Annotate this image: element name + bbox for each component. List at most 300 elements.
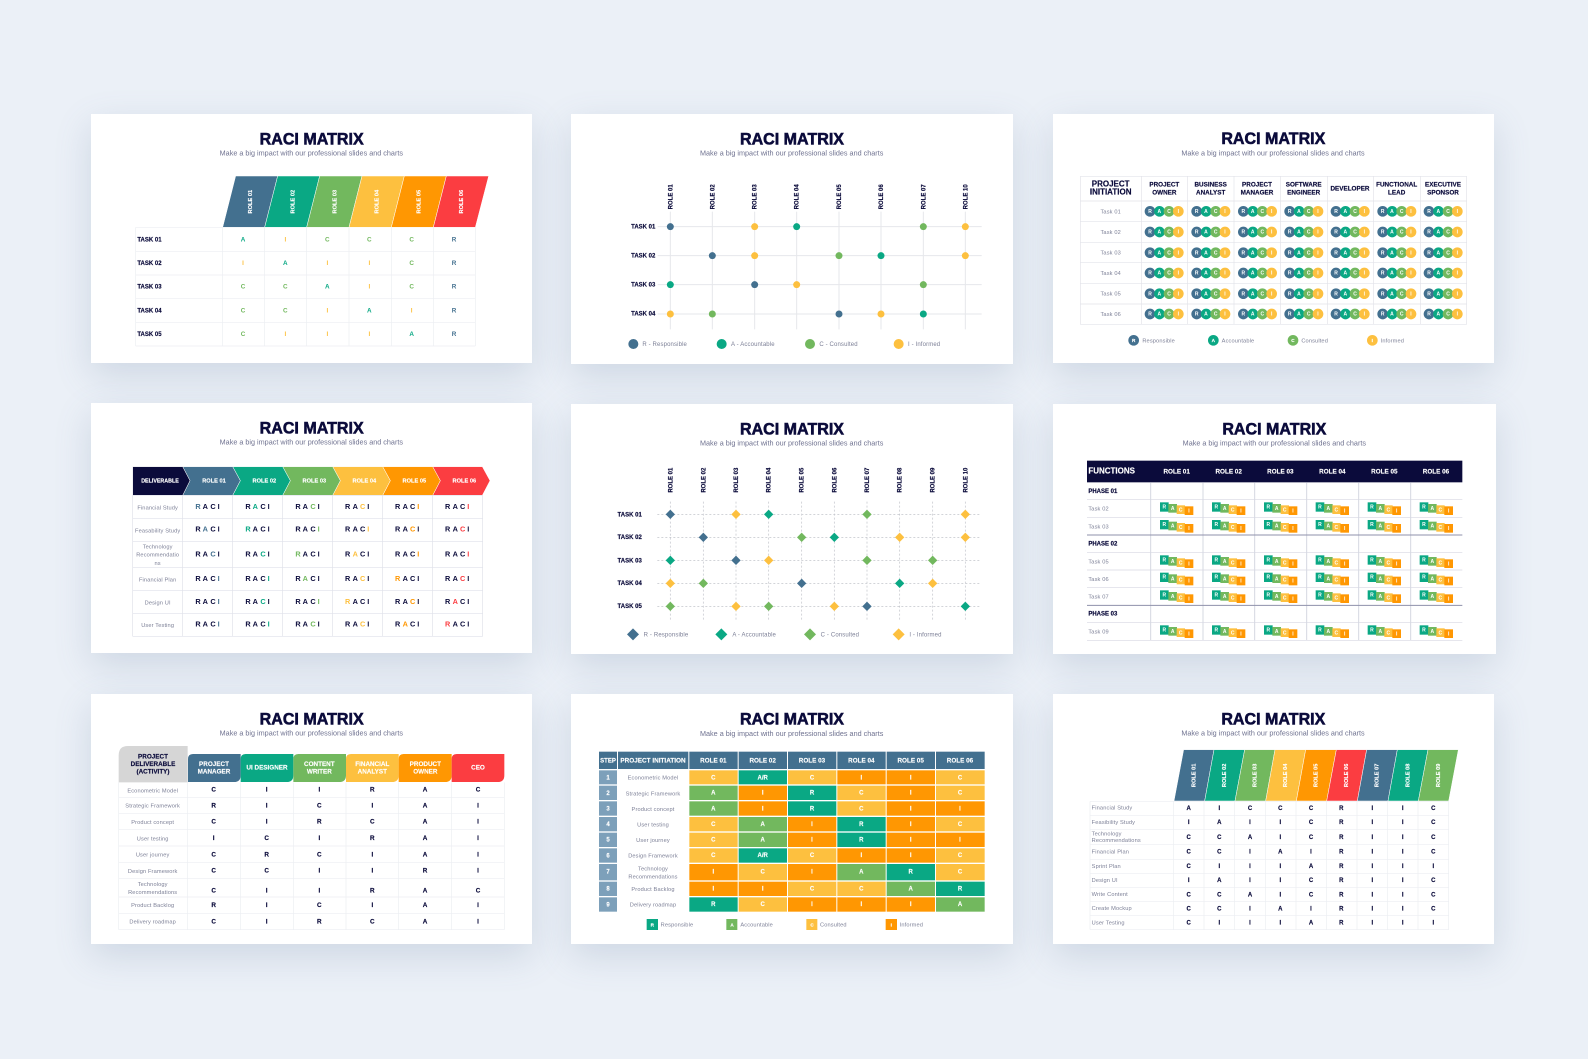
title: RACI MATRIX [260,710,364,729]
activity table: RICIAI [211,902,479,909]
phase table: RACI [1370,557,1398,567]
deliverable table: Feasability Study [135,528,180,534]
dot grid chart: TASK 02 [631,254,656,260]
chip table: RACI [1334,291,1366,297]
phase table: RACI [1215,557,1242,567]
heatmap table: A [958,902,963,908]
heatmap table: I [811,870,813,876]
heatmap table: I [811,902,813,908]
legend: C - Consulted [821,632,859,638]
deliverable table: RACI [295,620,320,629]
deliverable table: RACI [395,550,419,559]
subtitle: Make a big impact with our professional slides and charts [700,729,884,738]
heatmap table: Econometric Model [628,776,678,782]
chip table: RACI [1288,209,1319,215]
slanted role headers: ROLE 05 [417,190,423,213]
chip table: RACI [1242,230,1273,236]
heatmap table: A/R [757,853,768,859]
task table: IAIICRIIC [1188,820,1436,826]
panel: circle chip matrix [1053,114,1494,363]
heatmap table: A [760,838,765,844]
deliverable table: User Testing [141,623,174,629]
functions header bar: ROLE 02 [1215,468,1242,475]
legend: C [810,922,814,927]
chip table: RACI [1148,230,1180,236]
deliverable table: RACI [345,597,369,606]
role labels: ROLE 06 [879,184,885,209]
phase table: RACI [1422,627,1450,637]
deliverable table: RACI [445,597,469,606]
heatmap table: C [859,791,864,797]
chip table: RACI [1381,312,1412,318]
phase table [1087,482,1462,640]
task table: C [367,236,372,243]
phase table: Task 07 [1088,594,1109,600]
heatmap table: I [959,806,961,812]
diamond grid chart: TASK 04 [618,581,642,587]
phase table: RACI [1422,575,1450,585]
role labels: ROLE 04 [767,467,773,493]
chip table: RACI [1334,312,1366,318]
activity table: RICIAI [211,802,479,809]
title: RACI MATRIX [740,420,844,439]
heatmap table: I [910,853,912,859]
chip table: RACI [1427,230,1459,236]
phase table: Task 05 [1088,560,1109,566]
chip table: RACI [1334,250,1366,256]
heatmap table: A [859,870,864,876]
legend: A - Accountable [732,632,777,638]
chip table: Task 04 [1100,271,1121,277]
task table: TASK 03 [137,284,162,290]
deliverable table: RACI [395,597,419,606]
role labels [668,184,969,209]
heatmap table: C [810,853,815,859]
panel: dot grid matrix [571,114,1013,364]
role headers: PROJECT [199,761,229,768]
table headers: ENGINEER [1287,190,1321,197]
chip table: RACI [1427,291,1459,297]
chip table: RACI [1195,312,1226,318]
dot grid chart [631,212,982,329]
role labels: ROLE 10 [963,184,969,209]
heatmap table: A [711,806,716,812]
task table: IAIICRIIC [1188,878,1436,884]
heatmap table: C [810,775,815,781]
chip table: RACI [1381,250,1412,256]
chevron headers: ROLE 03 [303,479,326,485]
slanted role headers: ROLE 04 [1283,763,1289,787]
deliverable header cell [119,746,188,782]
deliverable header cell: (ACTIVITY) [136,769,170,776]
heatmap table: C [711,822,716,828]
heatmap table: R [908,870,913,876]
slanted role headers: ROLE 01 [248,190,254,213]
deliverable table: RACI [445,502,469,511]
heatmap table: Strategic Framework [626,791,680,797]
table headers: EXECUTIVE [1425,182,1461,189]
phase table: RACI [1215,575,1242,585]
legend: C - Consulted [819,342,858,348]
legend: Responsible [661,922,693,928]
task table: Create Mockup [1092,906,1132,912]
chip table: Task 06 [1100,312,1121,318]
task table: CIIIARIII [1186,921,1434,927]
chip table [1080,176,1467,324]
subtitle: Make a big impact with our professional slides and charts [220,729,403,738]
heatmap table: A [908,887,913,893]
deliverable table: RACI [195,574,220,583]
chip table: RACI [1288,291,1319,297]
slanted role headers: ROLE 08 [1405,764,1411,787]
heatmap table: Product concept [632,807,675,813]
diamond grid chart: TASK 01 [618,512,642,518]
task table: I [368,331,370,338]
deliverable table: RACI [445,550,469,559]
heatmap table: I [811,838,813,844]
heatmap table: I [712,887,714,893]
heatmap table: I [910,838,912,844]
functions header bar: FUNCTIONS [1088,466,1136,475]
chevron headers: ROLE 02 [253,479,276,485]
phase table: RACI [1370,592,1398,602]
phase table: RACI [1318,575,1346,585]
slanted role headers: ROLE 06 [1344,764,1350,787]
activity table: User testing [137,836,169,842]
chip table: RACI [1427,271,1459,277]
task table: Feasibility Study [1092,820,1135,826]
heatmap table: 4 [606,822,610,828]
activity table: CIRCAI [211,919,479,926]
chip table: RACI [1288,250,1319,256]
functions header bar: ROLE 03 [1267,468,1294,475]
deliverable header cell: PROJECT [138,753,168,760]
deliverable table: RACI [445,525,469,534]
table headers: LEAD [1388,190,1406,197]
heatmap table: R [711,902,716,908]
slanted role headers: ROLE 09 [1436,764,1442,787]
heatmap table: I [860,775,862,781]
role labels: ROLE 07 [921,184,927,209]
slanted role headers: ROLE 07 [1375,764,1381,787]
phase table: RACI [1163,504,1190,514]
task table: Sprint Plan [1092,864,1121,870]
deliverable table: RACI [195,597,220,606]
phase table: RACI [1215,627,1242,637]
phase table: RACI [1370,504,1398,514]
heatmap table: C [859,806,864,812]
panel: slanted header matrix [91,114,532,363]
deliverable table: Financial Study [137,505,178,511]
heatmap table: I [910,902,912,908]
role labels: ROLE 10 [963,467,969,493]
table headers: PROJECT [1149,182,1179,189]
title: RACI MATRIX [740,710,844,729]
chip table: RACI [1195,209,1226,215]
chip table: RACI [1242,291,1273,297]
task table: Write Content [1092,892,1128,898]
phase table: RACI [1318,522,1346,532]
legend: A [730,922,734,927]
deliverable table: Financial Plan [139,577,176,583]
phase table: RACI [1422,557,1450,567]
deliverable table: RACI [445,574,469,583]
heatmap table: C [958,870,963,876]
deliverable table: RACI [195,620,220,629]
task table: A [241,236,246,243]
phase table: RACI [1318,627,1346,637]
role labels [668,467,969,493]
phase table: RACI [1163,627,1190,637]
legend [628,339,940,349]
task table: Technology [1092,832,1122,838]
role headers: WRITER [307,769,332,776]
heatmap table: I [762,887,764,893]
heatmap header: ROLE 04 [848,757,875,764]
heatmap table: C [711,838,716,844]
slanted role headers [1174,750,1458,801]
chip table: RACI [1242,312,1273,318]
role labels: ROLE 02 [701,467,707,493]
heatmap table: C [810,887,815,893]
heatmap table: User journey [636,838,670,844]
heatmap table: C [958,775,963,781]
phase table: RACI [1267,627,1294,637]
activity table: CRCIAI [211,851,479,858]
deliverable table: RACI [245,597,270,606]
activity table: Delivery roadmap [129,920,176,926]
functions header bar [1087,461,1462,482]
heatmap header: ROLE 01 [700,757,727,764]
task table: C [409,283,414,290]
legend: I [1372,338,1373,343]
heatmap header [599,752,985,769]
phase table: RACI [1163,522,1190,532]
task table: Financial Study [1092,806,1132,812]
legend: Accountable [740,922,773,928]
phase table: RACI [1267,522,1294,532]
chip table: RACI [1427,312,1459,318]
slanted role headers [223,176,489,227]
heatmap table: A [760,822,765,828]
heatmap table: R [958,887,963,893]
phase table: Task 09 [1088,630,1109,636]
deliverable table: Recommendatio [136,553,179,559]
heatmap table: C [760,902,765,908]
legend: R [1132,338,1136,343]
legend [1128,335,1404,346]
heatmap table: I [762,806,764,812]
functions header bar: ROLE 04 [1319,468,1346,475]
role labels: ROLE 02 [710,184,716,209]
chip table: RACI [1288,230,1319,236]
subtitle: Make a big impact with our professional slides and charts [700,148,884,157]
deliverable table: RACI [345,620,369,629]
chip table: RACI [1334,209,1366,215]
task table [1090,801,1449,930]
role labels: ROLE 07 [865,467,871,493]
chip table: RACI [1195,230,1226,236]
functions header bar: ROLE 01 [1163,468,1190,475]
heatmap table: I [910,822,912,828]
phase table: RACI [1422,592,1450,602]
subtitle: Make a big impact with our professional slides and charts [700,439,884,448]
activity table: CCIIRI [211,868,479,875]
chip table: RACI [1334,230,1366,236]
task table: I [411,307,413,314]
heatmap table: I [712,870,714,876]
activity table: Product Backlog [131,903,174,909]
table headers [1090,179,1461,197]
slanted role headers: ROLE 01 [1191,764,1197,787]
deliverable table: RACI [195,502,220,511]
diamond grid chart: TASK 02 [618,535,642,541]
chip table: RACI [1334,271,1366,277]
phase table: RACI [1267,504,1294,514]
heatmap table: Design Framework [628,854,678,860]
role headers: CEO [471,765,485,772]
role labels: ROLE 03 [753,184,759,209]
heatmap table: R [859,822,864,828]
heatmap header: ROLE 03 [799,757,826,764]
title: RACI MATRIX [740,129,844,148]
task table: TASK 05 [137,332,162,338]
table headers: DEVELOPER [1330,186,1370,193]
deliverable table [133,495,483,636]
legend: R [651,922,655,927]
subtitle: Make a big impact with our professional slides and charts [220,148,403,157]
heatmap table: C [760,870,765,876]
title: RACI MATRIX [1222,420,1326,439]
functions header bar: ROLE 06 [1423,468,1450,475]
legend [647,919,923,930]
phase table: RACI [1215,592,1242,602]
legend: Consulted [820,922,847,928]
table headers: MANAGER [1241,190,1274,197]
role labels: ROLE 05 [800,467,806,493]
deliverable table: RACI [395,502,419,511]
task table: R [452,236,457,243]
title: RACI MATRIX [1221,710,1325,729]
task table: A [283,260,288,267]
activity table: ICIRAI [213,835,479,842]
slanted role headers: ROLE 02 [1222,764,1228,787]
heatmap table: I [762,791,764,797]
task table: I [326,307,328,314]
table headers: FUNCTIONAL [1376,182,1417,189]
task table: C [409,260,414,267]
legend: Responsible [1142,338,1175,344]
subtitle: Make a big impact with our professional slides and charts [1183,439,1366,448]
legend: R - Responsible [644,632,689,638]
role headers: MANAGER [198,769,231,776]
deliverable header cell: DELIVERABLE [131,761,175,768]
phase table: RACI [1163,575,1190,585]
chip table: RACI [1427,209,1459,215]
deliverable table: RACI [245,502,270,511]
heatmap table: 9 [606,902,610,908]
role labels: ROLE 06 [832,467,838,493]
phase table: RACI [1163,592,1190,602]
chevron headers: ROLE 04 [353,479,377,485]
activity table: Product concept [131,820,174,826]
deliverable table: RACI [345,574,369,583]
task table: I [284,331,286,338]
title: RACI MATRIX [260,419,364,438]
legend: C [1291,338,1295,343]
phase table: RACI [1318,504,1346,514]
slanted role headers: ROLE 04 [375,189,381,213]
chip table: RACI [1288,271,1319,277]
chip table: RACI [1381,271,1412,277]
task table: R [452,283,457,290]
heatmap table: R [810,791,815,797]
deliverable table: RACI [295,574,320,583]
deliverable table: RACI [445,620,469,629]
role labels: ROLE 08 [898,467,904,493]
task table: C [241,283,246,290]
activity table [119,782,504,930]
chevron headers: ROLE 01 [202,479,226,485]
heatmap header: ROLE 02 [749,757,776,764]
chevron headers: ROLE 06 [453,479,476,485]
heatmap table: User testing [637,823,669,829]
role labels: ROLE 09 [931,467,937,493]
task table: R [452,307,457,314]
role headers: ANALYST [358,769,387,776]
phase table: RACI [1370,522,1398,532]
role labels: ROLE 01 [668,467,674,493]
task table [136,227,475,346]
legend: I - Informed [909,632,942,638]
heatmap table: 6 [606,853,610,859]
role headers: OWNER [413,769,438,776]
chevron headers: ROLE 05 [403,479,426,485]
chip table: RACI [1427,250,1459,256]
deliverable table: RACI [195,525,220,534]
subtitle: Make a big impact with our professional slides and charts [220,438,403,447]
task table: CIIIARIII [1186,864,1434,870]
deliverable table: RACI [345,550,369,559]
chip table: RACI [1381,209,1412,215]
activity table: Recommendations [128,890,177,896]
chip table: RACI [1148,312,1180,318]
panel: phase functions matrix [1053,404,1496,654]
panel: nine role slanted matrix [1053,694,1494,944]
heatmap header: ROLE 06 [947,757,974,764]
role labels: ROLE 04 [795,184,801,209]
heatmap table: Product Backlog [631,887,675,893]
heatmap header: ROLE 05 [897,757,924,764]
deliverable table: RACI [245,550,270,559]
heatmap table: I [910,806,912,812]
role headers: PRODUCT [410,761,441,768]
heatmap table: R [859,838,864,844]
heatmap table: I [811,822,813,828]
chip table: RACI [1242,250,1273,256]
chip table: RACI [1195,291,1226,297]
deliverable table: Design UI [145,600,171,606]
heatmap table: C [711,853,716,859]
heatmap table: A [711,791,716,797]
heatmap table: 5 [606,838,610,844]
task table: User Testing [1092,920,1125,926]
task table: CCIAIRIIC [1186,906,1436,912]
heatmap table: C [958,791,963,797]
heatmap table: C [958,853,963,859]
chip table: RACI [1148,209,1180,215]
task table: CCAICRIIC [1186,892,1436,898]
